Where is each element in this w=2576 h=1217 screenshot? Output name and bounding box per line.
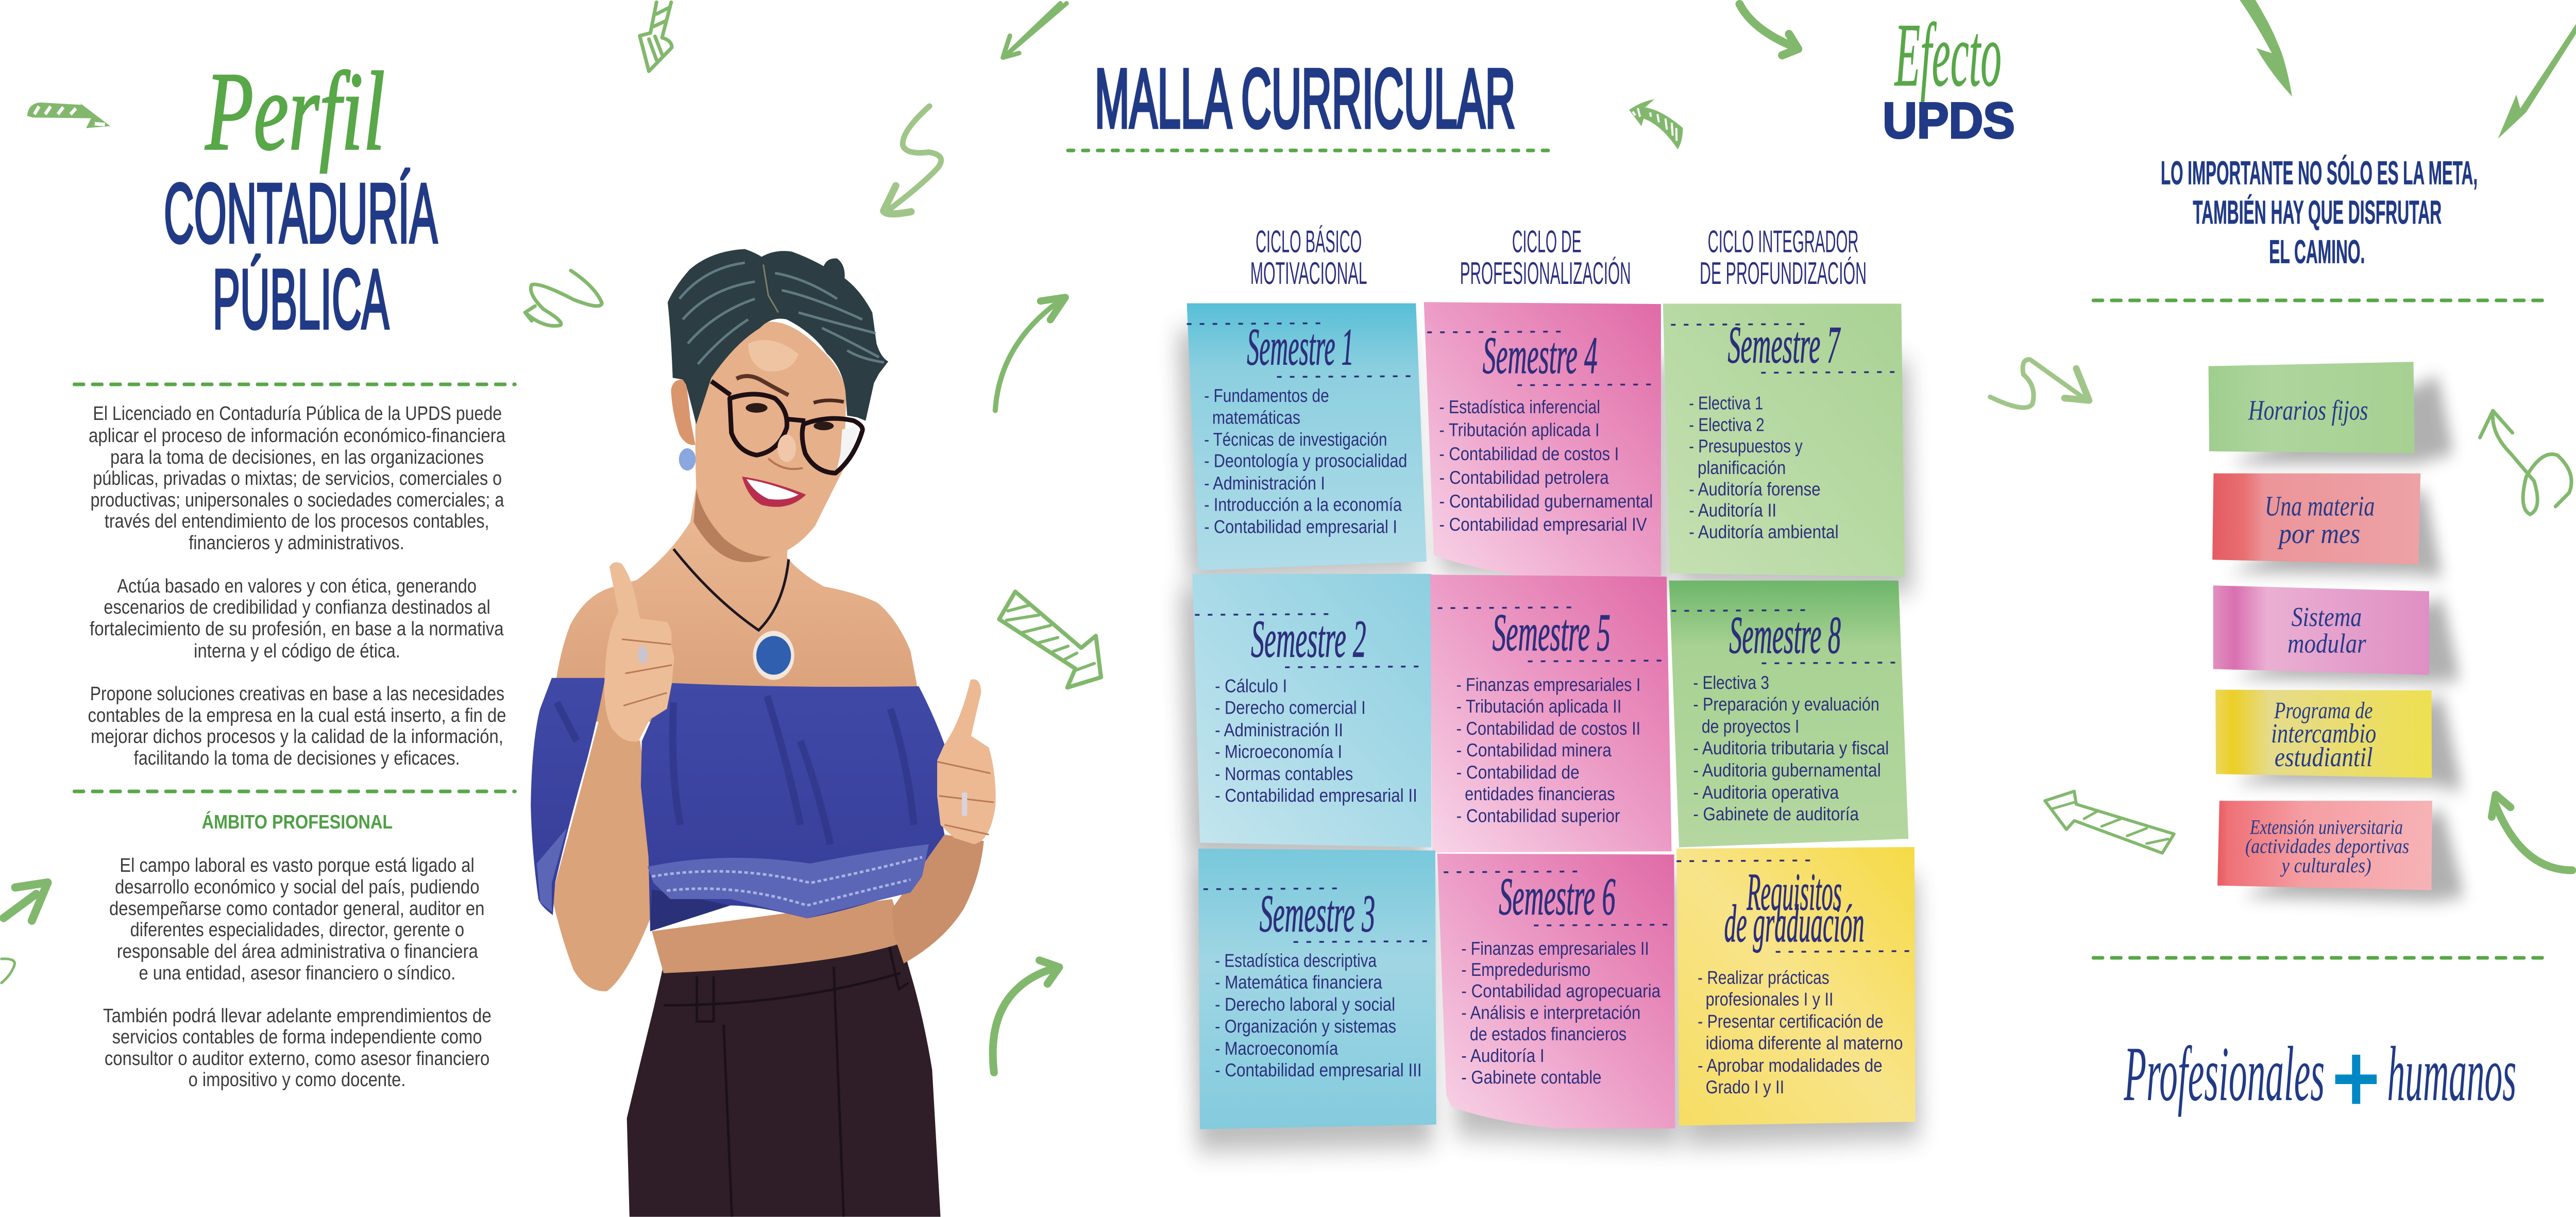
icon: hatched arrow top [640, 2, 672, 71]
list: materias semestre 4: - Estadística inferencial [1439, 397, 1600, 417]
list: materias semestre 8: - Auditoria tributaria y fiscal [1693, 737, 1889, 758]
icon: curved arrow top-centre [1739, 4, 1798, 55]
text block: perfil description: para la toma de decisiones, en las organizaciones [110, 447, 484, 468]
panel: Semestre 3: Semestre 3 [1260, 885, 1375, 943]
icon: arrow lower-left [2, 883, 48, 983]
list: requisitos: Grado I y II [1706, 1076, 1784, 1097]
text: MALLA CURRICULAR [1095, 52, 1515, 145]
title: Contaduría Pública [164, 165, 437, 346]
list: materias semestre 8: - Auditoria gubernamental [1693, 759, 1881, 781]
text block: ámbito profesional: consultor o auditor externo, como asesor financiero [105, 1048, 489, 1070]
panel: perfil (left column) [74, 49, 515, 1091]
tag: sistema modular: modular [2287, 628, 2366, 659]
list: materias semestre 4: - Contabilidad empresarial IV [1439, 514, 1647, 535]
text block: perfil description: interna y el código de ética. [194, 640, 400, 662]
text block: perfil description: productivas; unipersonales o sociedades comerciales; a [90, 489, 504, 511]
tag: una materia por mes: por mes [2277, 518, 2360, 549]
tag: una materia por mes [2212, 474, 2420, 564]
panel: Requisitos de graduación [1676, 847, 1916, 1126]
column headings: ciclos: CICLO BÁSICO [1256, 224, 1362, 259]
tag: extensión universitaria: Extensión universitaria [2249, 816, 2403, 839]
list: requisitos: profesionales I y II [1706, 989, 1833, 1009]
panel: Semestre 6: Semestre 6 [1499, 868, 1616, 926]
tag: una materia por mes: Una materia [2265, 491, 2375, 522]
list: materias semestre 5: - Contabilidad minera [1456, 739, 1612, 760]
tag: horarios fijos: Horarios fijos [2248, 395, 2368, 426]
list: materias semestre 7: - Electiva 1 [1689, 393, 1763, 414]
text block: ámbito profesional: desempeñarse como contador general, auditor en [109, 898, 484, 920]
icon: S arrow right [1990, 360, 2089, 408]
list: materias semestre 7 [1689, 393, 1839, 543]
list: materias semestre 1 [1204, 385, 1407, 537]
tag: horarios fijos [2209, 362, 2415, 453]
list: materias semestre 3: - Contabilidad empresarial III [1215, 1059, 1422, 1080]
text block: perfil description: Actúa basado en valores y con ética, generando [117, 576, 477, 597]
panel: Semestre 5: Semestre 5 [1493, 603, 1611, 662]
text block: ámbito profesional: responsable del área administrativa o financiera [117, 941, 479, 962]
heading: Perfil: Perfil [204, 49, 385, 174]
logo: Efecto UPDS [1883, 5, 2015, 149]
text: Efecto [1894, 5, 2002, 105]
list: materias semestre 3: - Estadística descriptiva [1215, 950, 1377, 971]
list: materias semestre 2: - Administración II [1215, 719, 1343, 740]
icon: curved arrow lower-centre [993, 960, 1059, 1073]
list: materias semestre 2: - Contabilidad empresarial II [1215, 785, 1417, 806]
slogan: profesionales + humanos: Profesionales [2124, 1030, 2325, 1117]
icon: curved arrow bottom-right [2492, 795, 2572, 870]
tag: extensión universitaria: y culturales) [2280, 854, 2371, 877]
list: materias semestre 4 [1439, 397, 1653, 535]
list: materias semestre 1: - Fundamentos de [1204, 385, 1329, 406]
text: Semestre 7 [1727, 316, 1841, 374]
text block: ámbito profesional: desarrollo económico y social del país, pudiendo [115, 876, 480, 898]
title: Contaduría Pública: PÚBLICA [213, 251, 389, 346]
list: materias semestre 8: - Preparación y evaluación [1693, 694, 1879, 715]
text block: lema [2161, 154, 2478, 270]
text: de graduación [1724, 894, 1865, 953]
list: materias semestre 6: de estados financieros [1470, 1023, 1626, 1044]
list: materias semestre 1: - Técnicas de investigación [1204, 429, 1387, 450]
text: Semestre 4 [1483, 326, 1598, 385]
text block: perfil description: aplicar el proceso de información económico-financiera [89, 425, 506, 447]
panel: Semestre 5 [1430, 574, 1672, 853]
text block: perfil description: contables de la empresa en la cual está inserto, a fin de [88, 705, 506, 726]
icon: hatched curved arrow [1629, 99, 1683, 149]
text block: perfil description: escenarios de credibilidad y confianza destinados al [104, 597, 490, 618]
list: materias semestre 3: - Macroeconomía [1215, 1038, 1338, 1059]
heading: Requisitos de graduación [1724, 863, 1865, 953]
list: materias semestre 3 [1215, 950, 1422, 1080]
panel: Semestre 4: - Contabilidad gubernamental [1439, 492, 1653, 512]
text block: perfil description: fortalecimiento de su profesión, en base a la normativa [90, 618, 504, 640]
list: materias semestre 6: - Auditoría I [1461, 1045, 1545, 1066]
tag: programa de intercambio estudiantil [2215, 690, 2432, 778]
list: materias semestre 6: - Emprededurismo [1461, 959, 1590, 980]
column headings: ciclos: CICLO DE [1512, 224, 1582, 259]
list: materias semestre 7: planificación [1698, 458, 1786, 478]
panel: Semestre 2 [1192, 574, 1431, 848]
panel: Semestre 4 [1424, 302, 1661, 576]
tag: extensión universitaria: (actividades deportivas [2245, 835, 2409, 858]
panel: Semestre 1: - Deontología y prosocialidad [1204, 451, 1407, 471]
column headings: ciclos: PROFESIONALIZACIÓN [1460, 256, 1631, 291]
text block: perfil description: través del entendimiento de los procesos contables, [105, 511, 489, 532]
list: materias semestre 6 [1461, 938, 1661, 1088]
list: requisitos [1698, 967, 1903, 1097]
icon: arrow top centre-left [1003, 4, 1066, 58]
text block: perfil description [88, 403, 506, 769]
icon: arrow top-right A [2240, 0, 2292, 96]
list: materias semestre 8: de proyectos I [1702, 716, 1799, 737]
text: DE PROFUNDIZACIÓN [1700, 256, 1867, 291]
list: materias semestre 3: - Matemática financiera [1215, 972, 1382, 992]
list: materias semestre 8: - Electiva 3 [1693, 672, 1769, 693]
text block: perfil description: facilitando la toma de decisiones y eficaces. [134, 748, 460, 769]
list: materias semestre 7: - Auditoría forense [1689, 479, 1821, 500]
panel: Requisitos de graduación: Requisitos [1747, 863, 1842, 921]
text block: ámbito profesional: e una entidad, asesor financiero o síndico. [139, 962, 455, 984]
column headings: ciclos [1250, 224, 1867, 291]
panel: Semestre 1: - Introducción a la economía [1204, 495, 1402, 515]
tag: sistema modular [2213, 585, 2429, 675]
panel: Semestre 8 [1669, 581, 1908, 848]
text block: perfil description: mejorar dichos procesos y la calidad de la información, [91, 726, 503, 748]
panel: Semestre 6 [1437, 854, 1675, 1128]
list: materias semestre 2: - Normas contables [1215, 763, 1353, 784]
list: materias semestre 6: - Contabilidad agropecuaria [1461, 980, 1661, 1001]
text block: ámbito profesional: o impositivo y como docente. [189, 1069, 405, 1091]
list: materias semestre 8 [1693, 672, 1889, 824]
list: materias semestre 1: - Administración I [1204, 473, 1325, 494]
title: Contaduría Pública: CONTADURÍA [164, 165, 437, 261]
list: materias semestre 5: - Contabilidad de costos II [1456, 718, 1640, 739]
list: materias semestre 5: entidades financieras [1465, 783, 1615, 804]
tag: programa de intercambio estudiantil: estudiantil [2275, 741, 2373, 772]
list: materias semestre 4: - Contabilidad petrolera [1439, 467, 1609, 488]
text block: ámbito profesional [103, 855, 492, 1091]
text block: ámbito profesional: servicios contables de forma independiente como [112, 1026, 482, 1048]
list: materias semestre 4: - Contabilidad de costos I [1439, 444, 1619, 464]
photo: smiling student with thumbs up [531, 249, 996, 1217]
panel: Semestre 2: Semestre 2 [1251, 610, 1366, 668]
list: requisitos: - Aprobar modalidades de [1698, 1055, 1883, 1076]
panel: Semestre 3 [1198, 849, 1436, 1129]
list: materias semestre 5 [1456, 674, 1640, 826]
list: materias semestre 7: - Presupuestos y [1689, 436, 1803, 457]
column headings: ciclos: MOTIVACIONAL [1250, 256, 1367, 291]
list: materias semestre 6: - Gabinete contable [1461, 1067, 1601, 1088]
panel: Semestre 1 [1187, 303, 1427, 570]
list: materias semestre 6: - Finanzas empresariales II [1461, 938, 1649, 958]
list: materias semestre 3: - Derecho laboral y social [1215, 993, 1395, 1015]
logo: Efecto UPDS: UPDS [1883, 93, 2015, 149]
tag: sistema modular: Sistema [2292, 601, 2362, 632]
list: materias semestre 8: - Gabinete de auditoría [1693, 803, 1859, 824]
list: requisitos: - Presentar certificación de [1698, 1010, 1884, 1032]
tag: extensión universitaria [2217, 801, 2432, 890]
list: materias semestre 8: - Auditoria operativa [1693, 782, 1839, 802]
text block: lema: EL CAMINO. [2269, 233, 2365, 270]
list: materias semestre 7: - Electiva 2 [1689, 415, 1765, 435]
text block: perfil description: El Licenciado en Contaduría Pública de la UPDS puede [93, 403, 502, 425]
list: materias semestre 2: - Derecho comercial I [1215, 697, 1366, 718]
text block: ámbito profesional: También podrá llevar adelante emprendimientos de [103, 1005, 492, 1027]
icon: hatched arrow top-left [27, 103, 110, 128]
tag: programa de intercambio estudiantil: Programa de [2274, 698, 2373, 724]
list: requisitos: idioma diferente al materno [1706, 1032, 1903, 1053]
list: materias semestre 7: - Auditoría II [1689, 500, 1776, 521]
list: requisitos: - Realizar prácticas [1698, 967, 1829, 988]
list: materias semestre 2: - Cálculo I [1215, 675, 1287, 696]
panel: Semestre 8: Semestre 8 [1729, 606, 1841, 665]
icon: arrow top-right B [2498, 24, 2576, 139]
list: materias semestre 5: - Tributación aplicada II [1456, 696, 1621, 717]
text block: perfil description: financieros y administrativos. [189, 532, 404, 554]
tag: programa de intercambio estudiantil: intercambio [2271, 718, 2376, 749]
list: materias semestre 6: - Análisis e interpretación [1461, 1002, 1640, 1023]
text block: ámbito profesional: diferentes especialidades, director, gerente o [130, 919, 464, 941]
panel: Semestre 7: - Auditoría ambiental [1689, 522, 1839, 543]
list: materias semestre 5: - Finanzas empresariales I [1456, 674, 1640, 695]
icon: hatched arrow right [2045, 791, 2174, 853]
heading: ámbito profesional: ÁMBITO PROFESIONAL [202, 811, 393, 833]
list: materias semestre 2 [1215, 675, 1417, 806]
text: CICLO INTEGRADOR [1708, 224, 1859, 259]
text block: perfil description: públicas, privadas o mixtas; de servicios, comerciales o [93, 468, 502, 489]
text block: ámbito profesional: El campo laboral es vasto porque está ligado al [120, 855, 474, 876]
icon: loop arrow right [2480, 411, 2571, 514]
panel: Semestre 7 [1663, 303, 1905, 577]
icon: S arrow [884, 106, 941, 214]
text: Semestre 1 [1247, 317, 1354, 376]
list: materias semestre 2: - Microeconomía I [1215, 741, 1342, 762]
list: materias semestre 4: - Tributación aplicada I [1439, 420, 1600, 441]
icon: squiggle arrow left [525, 271, 602, 326]
list: materias semestre 3: - Organización y sistemas [1215, 1016, 1396, 1037]
text block: perfil description: Propone soluciones creativas en base a las necesidades [90, 683, 504, 705]
list: materias semestre 5: - Contabilidad de [1456, 762, 1580, 782]
icon: curved arrow upper-centre [995, 297, 1065, 411]
list: materias semestre 1: matemáticas [1212, 408, 1300, 428]
list: materias semestre 1: - Contabilidad empresarial I [1204, 517, 1397, 537]
icon: hatched arrow centre [999, 591, 1101, 687]
list: materias semestre 5: - Contabilidad superior [1456, 805, 1620, 826]
